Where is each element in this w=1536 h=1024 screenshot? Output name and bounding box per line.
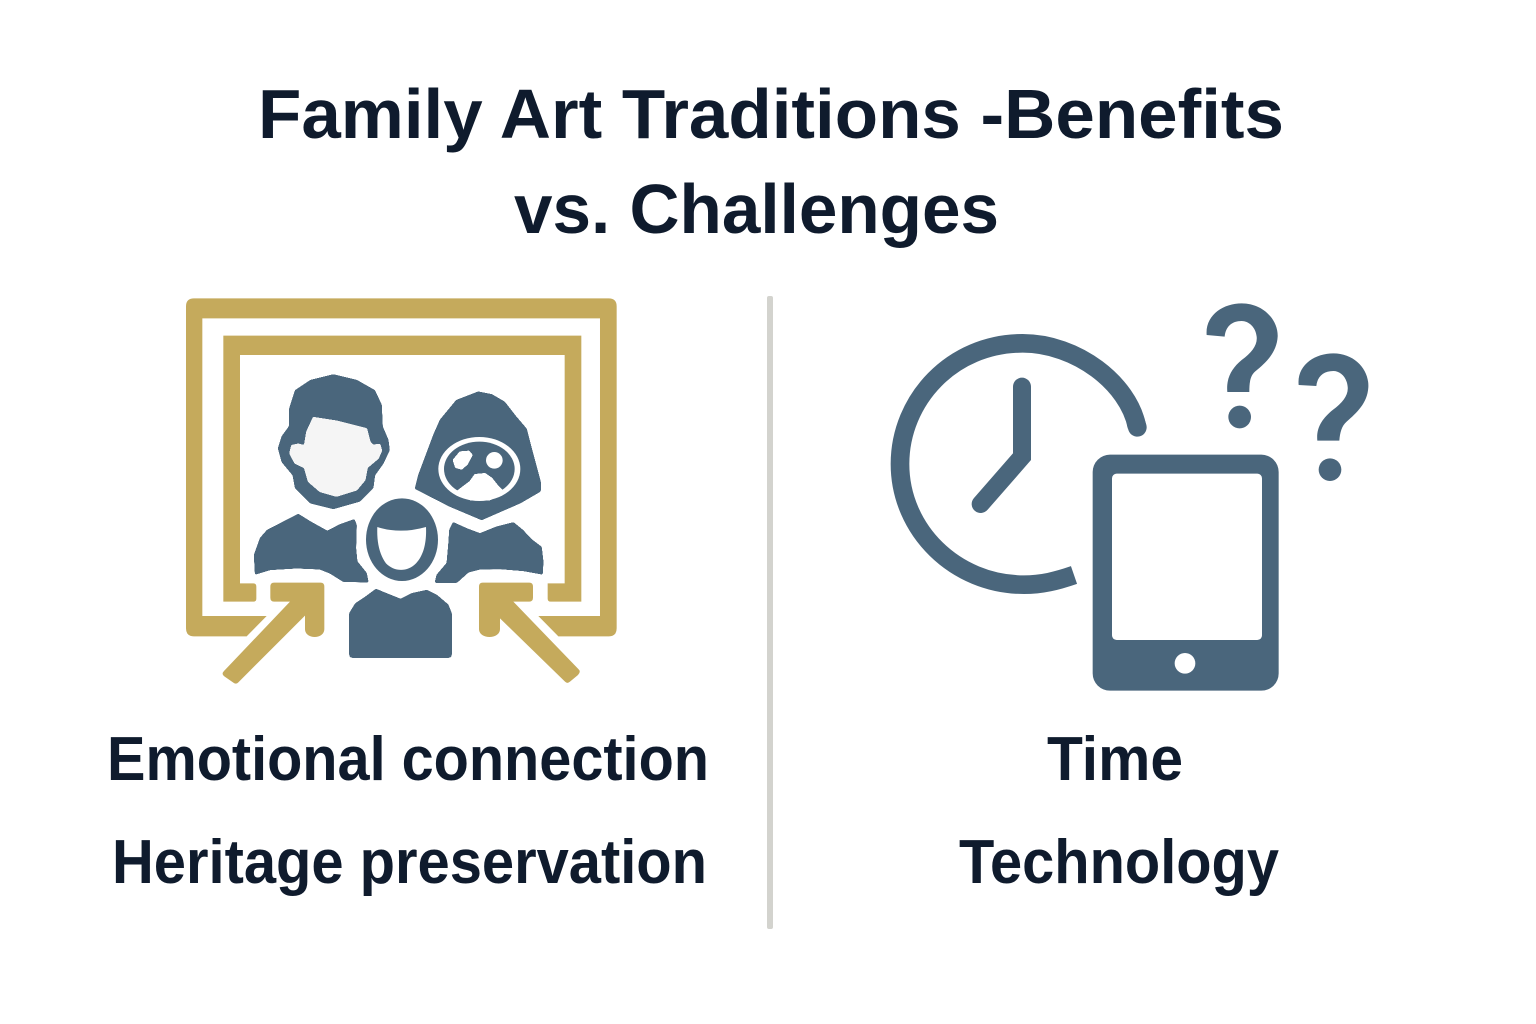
clock ring end cap <box>1136 424 1137 427</box>
label: time: Time <box>1047 725 1183 794</box>
label: technology: Technology <box>959 828 1279 897</box>
tablet screen <box>1112 474 1262 640</box>
panel: benefits <box>107 298 709 897</box>
icon: family portrait in frame <box>186 298 617 684</box>
large question mark <box>1207 303 1278 428</box>
tablet home button <box>1175 653 1195 674</box>
panel: challenges <box>900 303 1368 897</box>
title: vs. Challenges <box>514 170 999 248</box>
title: Family Art Traditions -Benefits <box>258 75 1284 153</box>
clock ring <box>900 343 1137 585</box>
label: emotional connection: Emotional connection <box>107 725 709 794</box>
mother eyes <box>486 452 503 469</box>
mother hood <box>416 392 540 519</box>
child face <box>377 527 426 570</box>
inner gold frame <box>223 336 581 602</box>
outer gold frame <box>186 298 617 636</box>
right gold arrow <box>479 583 580 683</box>
small question mark <box>1299 353 1368 481</box>
title <box>258 75 1284 248</box>
label: heritage preservation: Heritage preservation <box>112 828 707 897</box>
clock hands <box>981 387 1022 504</box>
father face <box>290 417 382 496</box>
child body <box>350 590 451 657</box>
mother mouth <box>456 474 504 500</box>
icon: clock, tablet and question marks <box>900 303 1368 691</box>
divider <box>767 296 773 929</box>
child head <box>366 498 438 581</box>
mother body <box>436 523 543 582</box>
tablet body <box>1093 455 1279 691</box>
father head <box>279 375 389 508</box>
mother face outline <box>438 437 520 501</box>
left gold arrow <box>223 583 324 684</box>
father body <box>255 515 368 582</box>
